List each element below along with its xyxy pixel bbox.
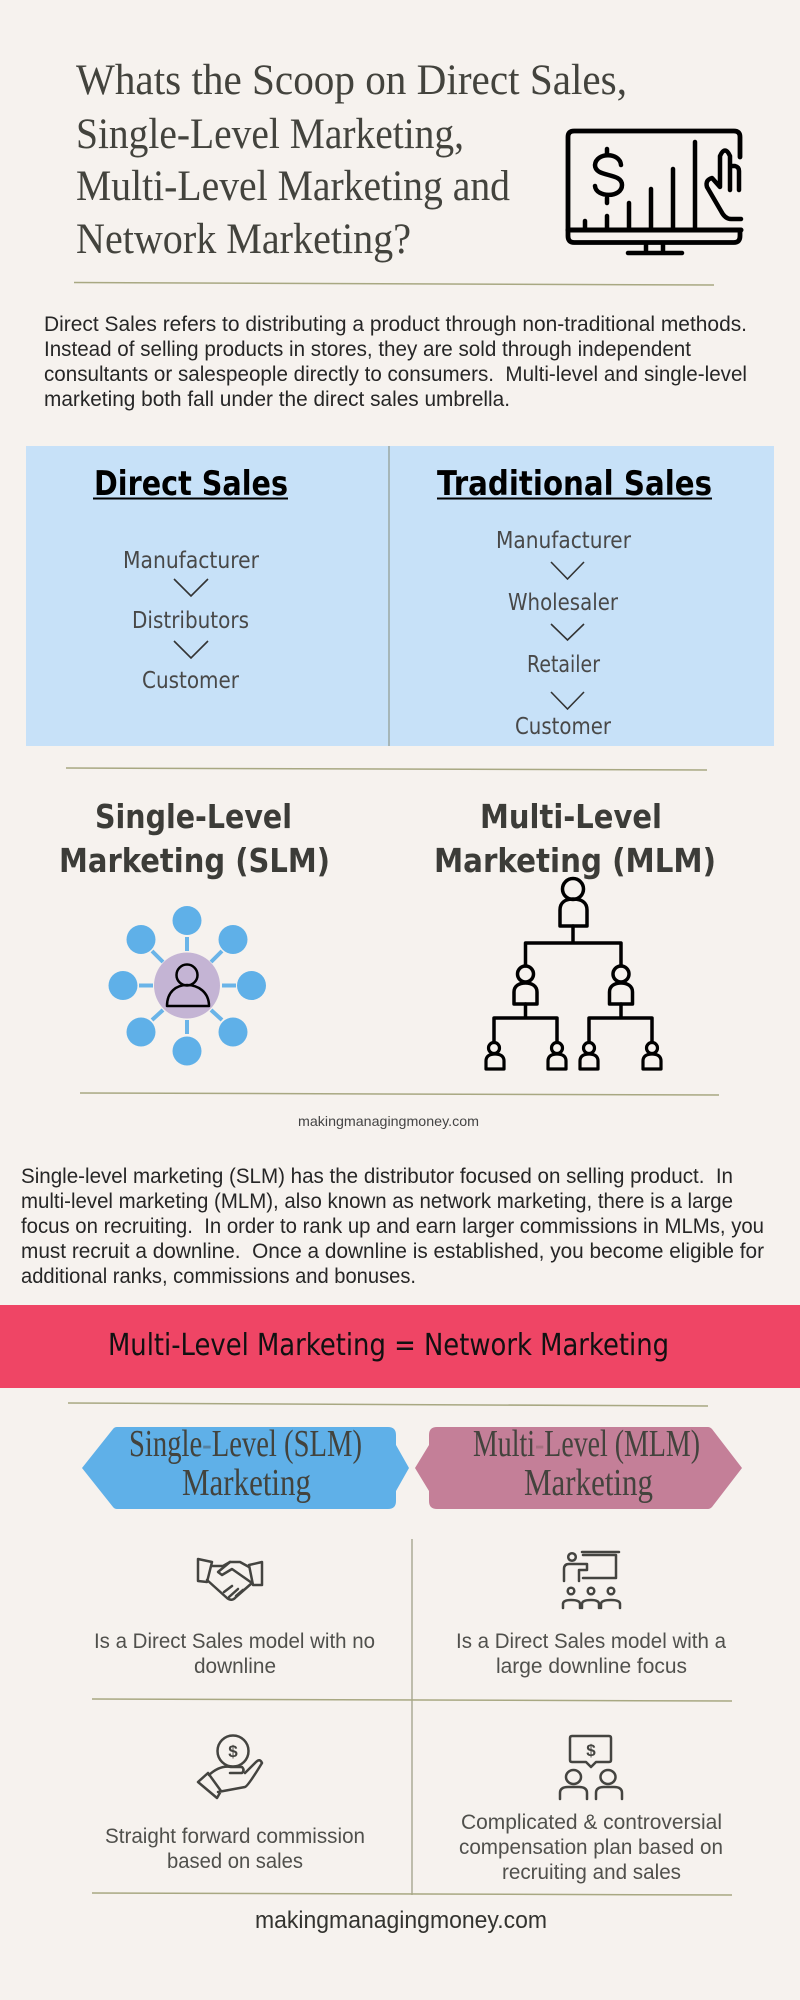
text: straightforward commission: based on sales [167, 1849, 303, 1873]
website credit: makingmanagingmoney.com [298, 1113, 479, 1129]
text block: direct sales intro: Instead of selling products in stores, they are sold through independent [44, 337, 691, 361]
flow: traditional sales: Customer [515, 714, 611, 740]
text: complicated compensation plan [459, 1810, 723, 1884]
heading: multi-level marketing [434, 797, 716, 880]
text: complicated compensation plan: Complicated & controversial [461, 1810, 722, 1834]
heading: single-level marketing: Single-Level [95, 797, 292, 836]
icon: multi-level tree [486, 878, 661, 1069]
flow: traditional sales: Wholesaler [508, 590, 618, 616]
flow: direct sales: Customer [142, 668, 239, 694]
divider [68, 1403, 708, 1406]
text: slm no downline [94, 1629, 375, 1678]
title: Network Marketing? [76, 216, 411, 263]
flow: traditional sales [496, 528, 631, 740]
text block: direct sales intro: Direct Sales refers to distributing a product through non-traditional methods. [44, 312, 747, 336]
banner: mlm equals network marketing: Multi-Level Marketing = Network Marketing [108, 1328, 669, 1363]
label: multi level marketing: Multi-Level (MLM) [473, 1423, 700, 1465]
text: mlm downline focus [456, 1629, 726, 1678]
icon: single-level hub and spoke [108, 906, 266, 1066]
title [76, 57, 627, 263]
icon: handshake [198, 1559, 262, 1600]
heading: direct sales: Direct Sales [94, 464, 288, 504]
label: single level marketing: Marketing [182, 1462, 311, 1504]
text block: slm vs mlm explanation: multi-level marketing (MLM), also known as network marketing, there is a large [21, 1189, 733, 1213]
label: single level marketing [82, 1423, 409, 1509]
text: complicated compensation plan: recruiting and sales [502, 1860, 681, 1884]
label: single level marketing: Single-Level (SLM) [129, 1423, 362, 1465]
flow: direct sales: Manufacturer [123, 548, 259, 574]
text block: slm vs mlm explanation: focus on recruiting. In order to rank up and earn larger commissions in MLMs, you [21, 1214, 764, 1238]
text: straightforward commission: Straight forward commission [105, 1824, 365, 1848]
flow: traditional sales: Retailer [527, 652, 600, 678]
heading: single-level marketing: Marketing (SLM) [59, 841, 330, 880]
comparison grid lines [92, 1539, 732, 1895]
text: mlm downline focus: Is a Direct Sales model with a [456, 1629, 726, 1653]
heading: traditional sales: Traditional Sales [437, 464, 712, 504]
text block: slm vs mlm explanation [21, 1164, 764, 1288]
panel: direct vs traditional sales [26, 446, 774, 746]
flow: direct sales: Distributors [132, 608, 249, 634]
text block: direct sales intro [44, 312, 747, 411]
text block: slm vs mlm explanation: must recruit a downline. Once a downline is established, you become eligible for [21, 1239, 764, 1263]
divider [74, 282, 714, 285]
text: slm no downline: downline [194, 1654, 276, 1678]
footer website: makingmanagingmoney.com [255, 1907, 547, 1934]
heading: multi-level marketing: Marketing (MLM) [434, 841, 716, 880]
divider [66, 768, 707, 770]
heading: multi-level marketing: Multi-Level [480, 797, 662, 836]
text: slm no downline: Is a Direct Sales model with no [94, 1629, 375, 1653]
icon: monitor with dollar and bar chart [568, 131, 741, 253]
text: complicated compensation plan: compensation plan based on [459, 1835, 723, 1859]
title: Multi-Level Marketing and [76, 163, 510, 210]
label: multi level marketing [415, 1423, 742, 1509]
icon: two people with dollar speech bubble [560, 1736, 622, 1799]
label: multi level marketing: Marketing [524, 1462, 653, 1504]
heading: single-level marketing [59, 797, 330, 880]
icon: hand holding coin [198, 1736, 262, 1798]
divider [80, 1093, 719, 1095]
icon: two people with dollar speech bubble: $ [586, 1741, 596, 1760]
flow: traditional sales: Manufacturer [496, 528, 631, 554]
text block: slm vs mlm explanation: additional ranks, commissions and bonuses. [21, 1264, 416, 1288]
text block: slm vs mlm explanation: Single-level marketing (SLM) has the distributor focused on selling product. In [21, 1164, 733, 1188]
banner: mlm equals network marketing [0, 1305, 800, 1388]
icon: hand holding coin: $ [228, 1742, 238, 1761]
text block: direct sales intro: marketing both fall under the direct sales umbrella. [44, 387, 510, 411]
text block: direct sales intro: consultants or salespeople directly to consumers. Multi-level and single-level [44, 362, 747, 386]
flow: direct sales [123, 548, 259, 694]
title: Whats the Scoop on Direct Sales, [76, 57, 627, 104]
text: straightforward commission [105, 1824, 365, 1873]
title: Single-Level Marketing, [76, 111, 464, 158]
icon: presenter with audience [563, 1552, 620, 1608]
text: mlm downline focus: large downline focus [496, 1654, 687, 1678]
